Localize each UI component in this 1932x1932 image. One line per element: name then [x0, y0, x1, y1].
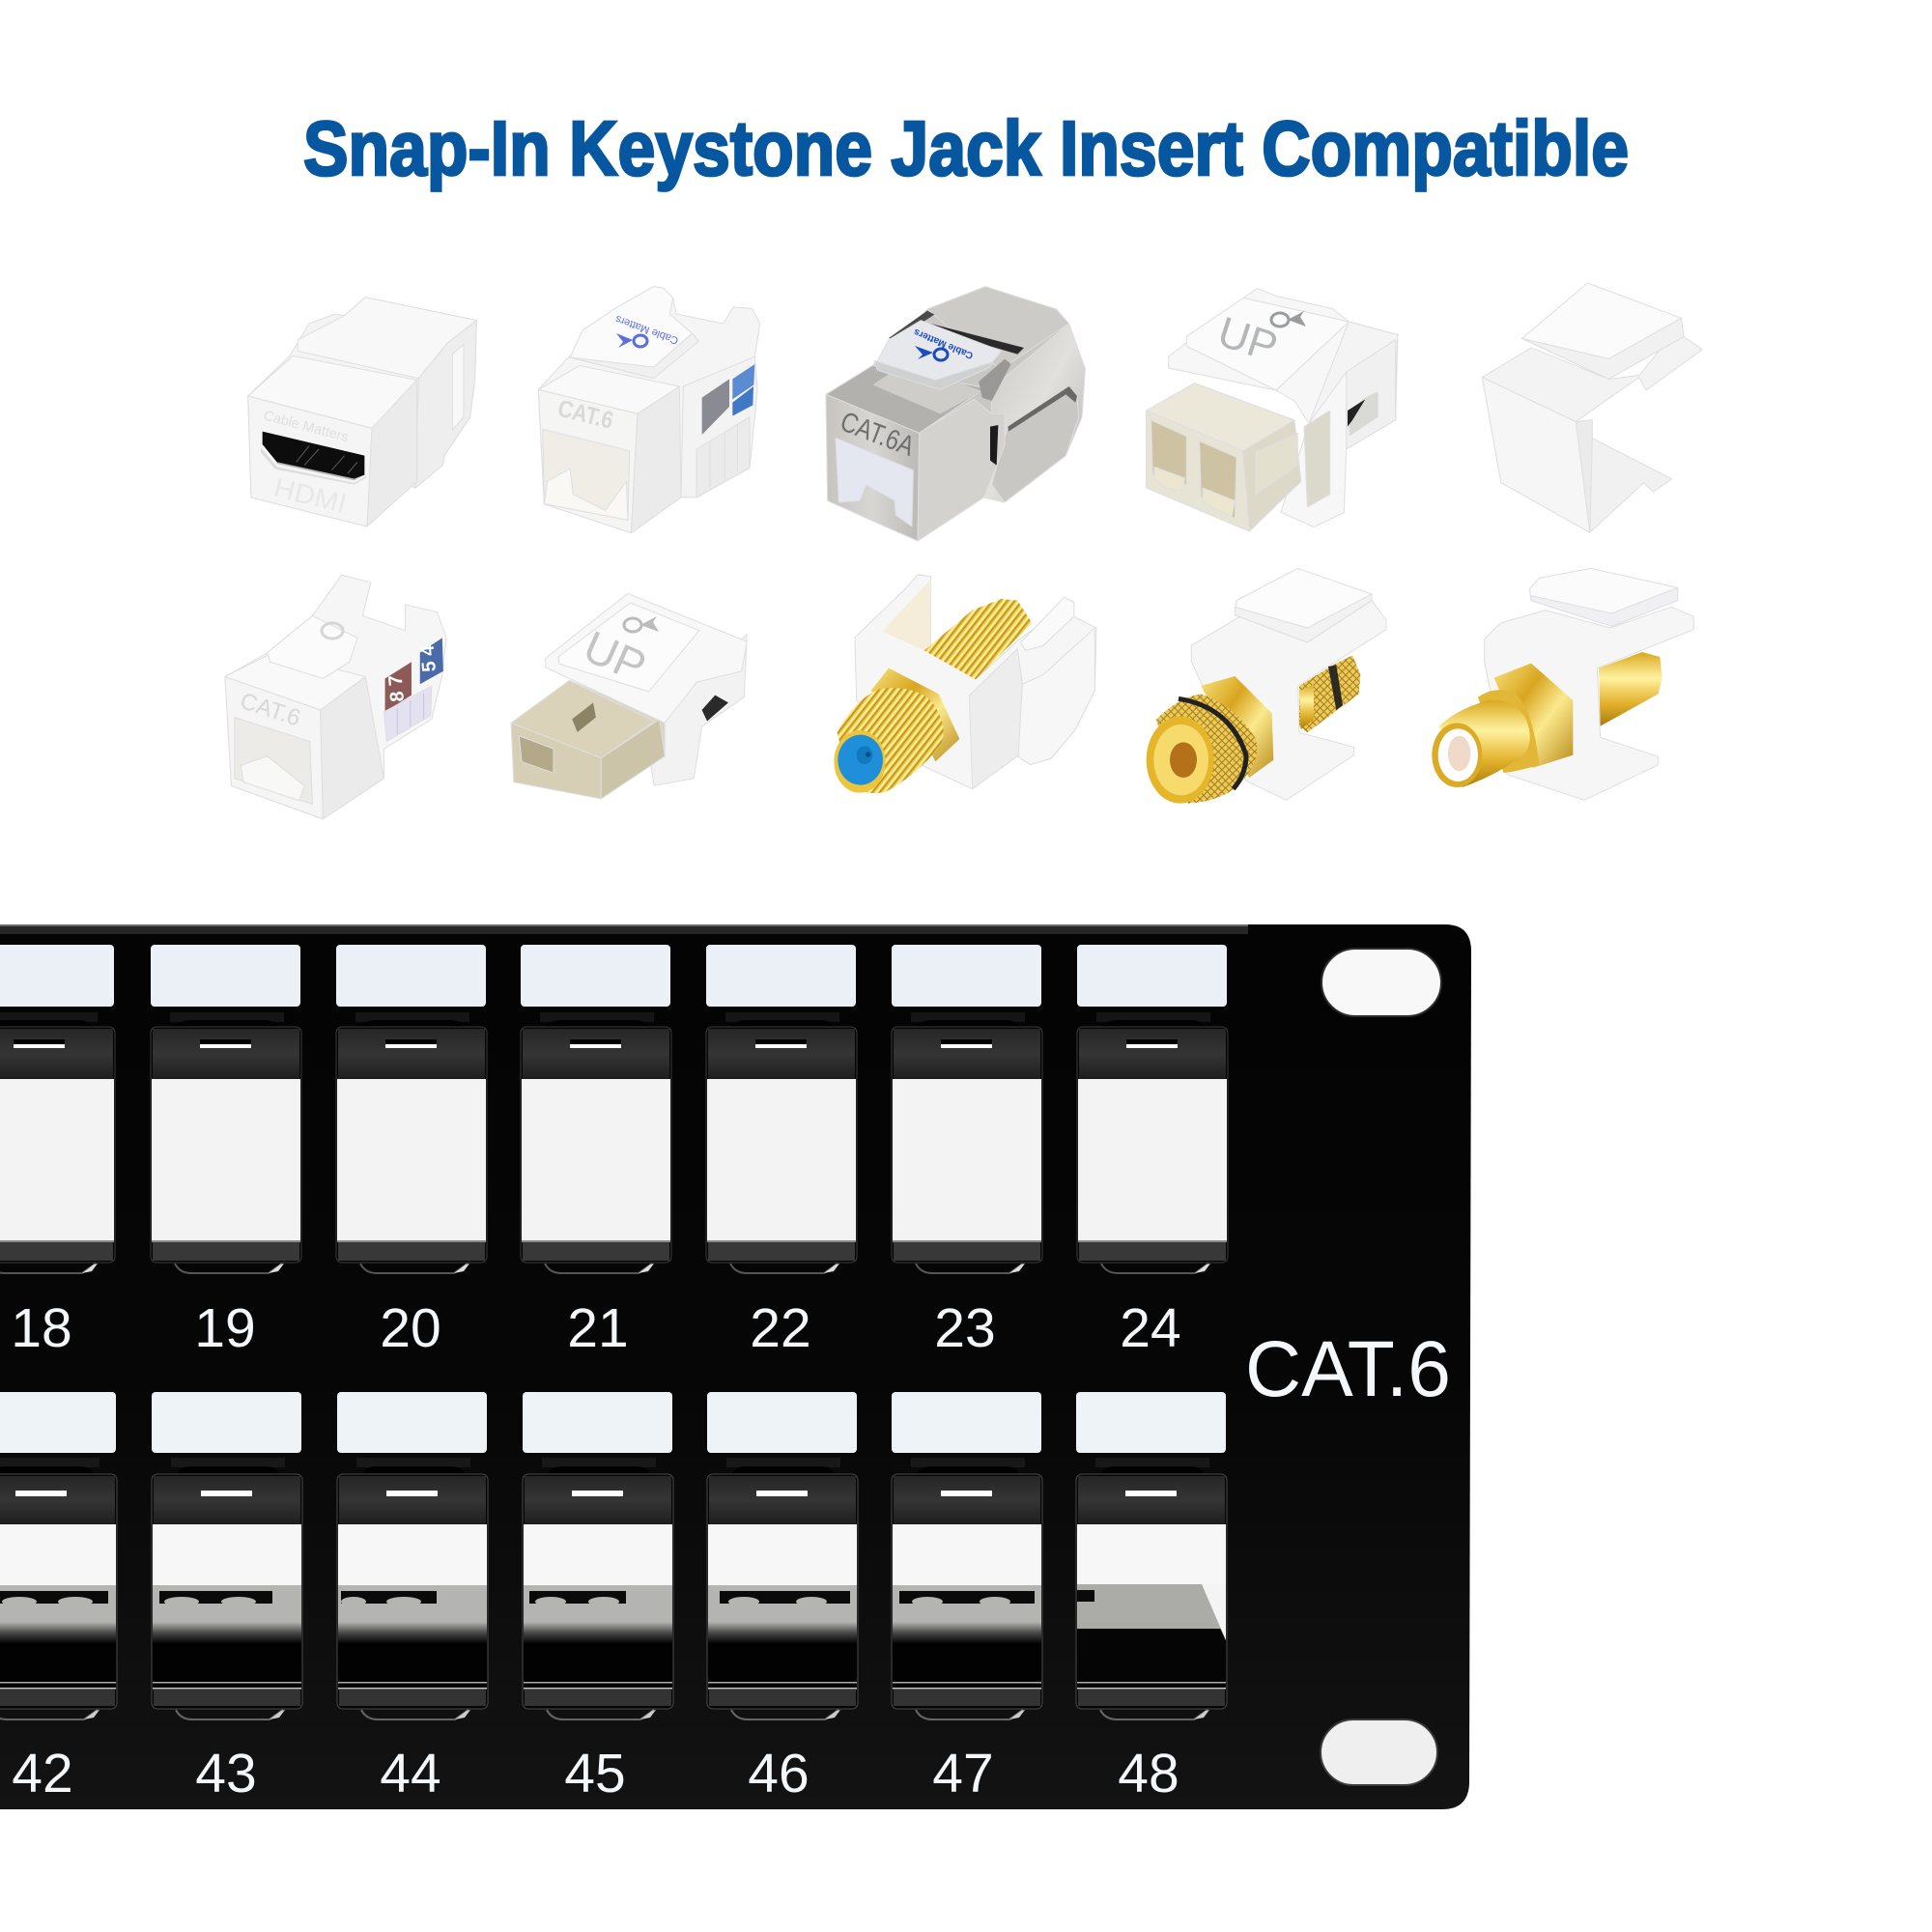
port 18: [0, 945, 115, 1359]
panel top edge highlight: [0, 924, 1248, 926]
port 48: 48: [1118, 1743, 1179, 1804]
port label: CAT.6A: [836, 407, 919, 463]
port 22: [706, 945, 857, 1359]
port 44: 44: [380, 1743, 441, 1804]
pin numbers: 8 7: [385, 674, 409, 702]
icon: Cat6 keystone jack with numbered pins: [225, 575, 446, 819]
icon: F-type coaxial keystone jack: [834, 575, 1096, 793]
icon: Cat6 keystone jack with blue wiring label: [538, 287, 760, 533]
panel: black 48-port patch panel: [0, 924, 1471, 1809]
icon: shielded Cat6A keystone jack: [826, 287, 1085, 541]
brand logo: [322, 623, 343, 639]
brand text: Cable Matters: [613, 313, 680, 346]
port label: CAT.6: [555, 395, 616, 435]
icon: SC fiber keystone jack: [511, 593, 747, 799]
port 45: [523, 1392, 673, 1804]
icon: banana binding post keystone jack: [1147, 568, 1386, 804]
port label: UP: [1212, 308, 1283, 371]
brand logo: [616, 333, 647, 348]
port 21: [521, 945, 671, 1359]
port 46: [707, 1392, 858, 1804]
port 23: 23: [934, 1297, 996, 1359]
port 46: 46: [748, 1743, 810, 1804]
panel top bevel: [0, 926, 1248, 934]
port label: UP: [577, 621, 653, 692]
mounting hole bottom: [1321, 1719, 1437, 1785]
icon: blank keystone insert: [1482, 283, 1702, 532]
port label: HDMI: [271, 472, 350, 519]
brand logo: [624, 616, 659, 632]
icon: LC duplex fiber keystone jack: [1147, 289, 1398, 531]
title: Snap-In Keystone Jack Insert Compatible: [303, 105, 1629, 191]
port label: CAT.6: [237, 688, 303, 731]
mounting hole top: [1321, 949, 1441, 1016]
model label: CAT.6: [1245, 1325, 1451, 1413]
port 42: 42: [12, 1743, 73, 1804]
port 20: [336, 945, 487, 1359]
brand logo: [1271, 311, 1306, 327]
port 45: 45: [564, 1743, 626, 1804]
port 19: [151, 945, 301, 1359]
port 22: 22: [750, 1297, 811, 1359]
port 21: 21: [567, 1297, 629, 1359]
icon: RCA keystone jack: [1432, 568, 1693, 800]
pin numbers: 5 4: [417, 643, 440, 672]
port 19: 19: [194, 1297, 256, 1359]
port 18: 18: [11, 1297, 72, 1359]
port 24: [1077, 945, 1228, 1359]
port 43: [152, 1392, 302, 1804]
brand text: Cable Matters: [262, 408, 350, 445]
port 48: [1076, 1392, 1227, 1804]
port 23: [892, 945, 1042, 1359]
port 47: 47: [932, 1743, 994, 1804]
port 44: [337, 1392, 488, 1804]
port 42: [0, 1392, 117, 1804]
port 43: 43: [195, 1743, 257, 1804]
panel plate: [0, 924, 1471, 1809]
port 24: 24: [1120, 1297, 1181, 1359]
brand logo: [915, 346, 948, 360]
brand text: Cable Matters: [912, 326, 975, 360]
icon: HDMI keystone jack: [248, 298, 476, 526]
port 47: [892, 1392, 1042, 1804]
port 20: 20: [380, 1297, 441, 1359]
